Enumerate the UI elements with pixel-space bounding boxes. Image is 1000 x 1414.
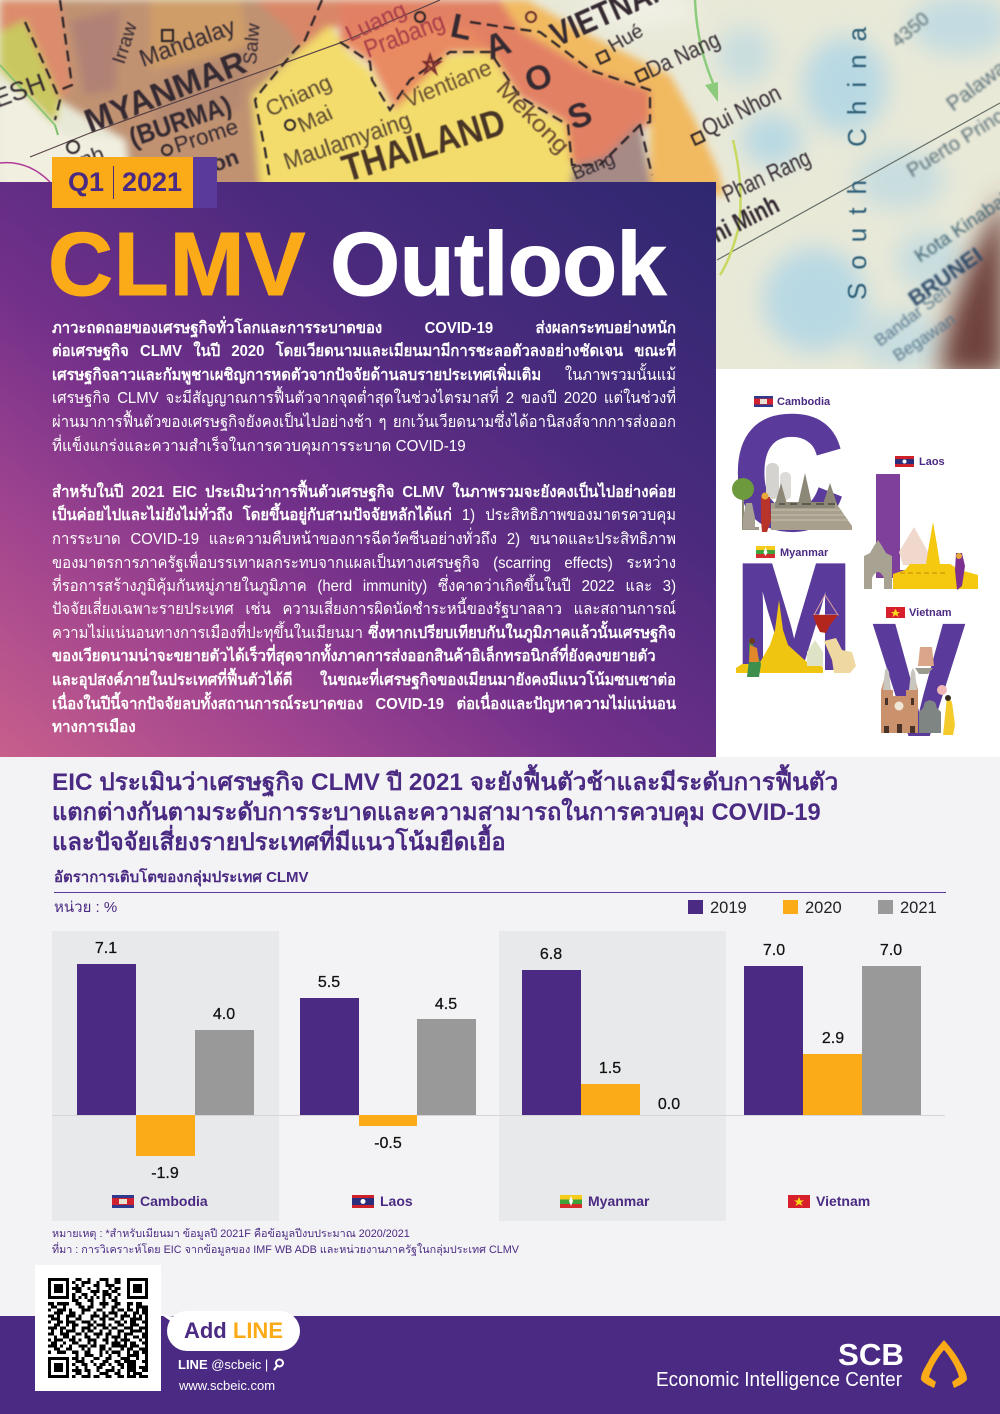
map photo background: Qui Nhon	[697, 80, 785, 142]
text block: intro paragraph 2: เป็นค่อยไปและไม่ยังไม่ทั่วถึง โดยขึ้นอยู่กับสามปัจจัยหลักได้แก่ 1) ประสิทธิภาพของมาตรควบคุม	[52, 507, 676, 524]
Myanmar group: Myanmar	[780, 547, 829, 559]
map photo background: Prabang	[360, 7, 449, 64]
unit label: หน่วย : %	[54, 899, 117, 916]
value labels: 5.5	[318, 974, 340, 991]
panel: CLMV illustration	[716, 369, 1000, 757]
map photo background: Mandalay	[136, 13, 239, 73]
footnotes: ที่มา : การวิเคราะห์โดย EIC จากข้อมูลของ IMF WB ADB และหน่วยงานภาครัฐในกลุ่มประเทศ CLMV	[52, 1244, 519, 1256]
bars: Myanmar	[522, 970, 640, 1115]
bars: Laos	[300, 998, 476, 1126]
value labels: 4.5	[435, 996, 457, 1013]
map photo background: Irraw	[109, 20, 142, 67]
QR code	[35, 1265, 161, 1391]
value labels: 7.0	[763, 942, 785, 959]
value labels: -0.5	[374, 1135, 402, 1152]
SCB wordmark: SCB	[838, 1337, 904, 1372]
map photo background: THAILAND	[337, 101, 510, 191]
value labels: 7.0	[880, 942, 902, 959]
text block: intro paragraph 2: ความไม่แน่นอนทางการเมืองที่ปะทุขึ้นในเมียนมา ซึ่งหากเปรียบเทียบกันในภูมิภาคแล้วนั้นเศรษฐกิจ	[52, 625, 676, 642]
map photo background: (BURMA)	[125, 90, 235, 153]
value labels: 1.5	[599, 1060, 621, 1077]
chart heading	[52, 764, 838, 856]
map photo background: Prome	[171, 114, 241, 158]
text block: intro paragraph 2: ของมาตรการภาครัฐเพื่อบรรเทาผลกระทบจากแผลเป็นทางเศรษฐกิจ (scarring effects) ระหว่าง	[52, 555, 676, 572]
chart subtitle: อัตราการเติบโตของกลุ่มประเทศ CLMV	[54, 869, 309, 886]
chart heading: EIC ประเมินว่าเศรษฐกิจ CLMV ปี 2021 จะยังฟื้นตัวช้าและมีระดับการฟื้นตัว	[52, 769, 838, 796]
footer band	[0, 1316, 1000, 1414]
icon: SCB logo	[921, 1340, 967, 1388]
text block: intro paragraph 2	[52, 480, 676, 736]
map photo background: L	[447, 7, 476, 48]
legend	[688, 899, 937, 917]
value labels	[95, 940, 902, 1182]
legend: 2019	[710, 899, 747, 917]
website: www.scbeic.com	[179, 1378, 275, 1393]
map photo background: Bang	[569, 149, 618, 185]
text block: intro paragraph 1: ต่อเศรษฐกิจ CLMV ในปี 2020 โดยเวียดนามและเมียนมามีการชะลอตัวลงอย่างชัดเจน ขณะที่	[52, 343, 676, 360]
map photo background: Phan Rang	[718, 144, 815, 208]
LINE handle: LINE @scbeic |	[178, 1357, 268, 1372]
text block: intro paragraph 1: ผ่านมาการฟื้นตัวของเศรษฐกิจยังคงเป็นไปอย่างช้า ๆ ยกเว้นเวียดนามซึ่งได้อานิสงส์จากการส่งออก	[52, 414, 676, 431]
text block: intro paragraph 2: ที่รอการสร้างภูมิคุ้มกันหมู่ภายในภูมิภาค (herd immunity) ซึ่งคาดว่าเกิดขึ้นในปี 2022 และ 3)	[52, 578, 676, 595]
SCB wordmark	[656, 1337, 904, 1391]
map photo background: A	[480, 23, 516, 68]
Myanmar group: M	[734, 532, 854, 702]
map photo background: Da Nang	[642, 26, 724, 83]
value labels: 0.0	[658, 1096, 680, 1113]
Cambodia group: C	[734, 383, 843, 562]
legend: 2021	[900, 899, 937, 917]
map photo background: Hué	[604, 20, 647, 57]
bar chart	[52, 899, 945, 1221]
text block: intro paragraph 2: สำหรับในปี 2021 EIC ประเมินว่าการฟื้นตัวเศรษฐกิจ CLMV ในภาพรวมจะยังคงเป็นไปอย่างค่อย	[52, 484, 676, 501]
value labels: 4.0	[213, 1006, 235, 1023]
map photo background: S	[563, 94, 597, 138]
country labels	[112, 1193, 870, 1209]
map photo background: Begawan	[890, 310, 959, 365]
map photo background: Maulamyaing	[280, 107, 415, 176]
country labels: Cambodia	[140, 1193, 208, 1209]
footnotes: หมายเหตุ : *สำหรับเมียนมา ข้อมูลปี 2021F คือข้อมูลปีงบประมาณ 2020/2021	[52, 1228, 410, 1240]
Laos group: Laos	[919, 456, 945, 468]
map photo background	[0, 0, 1000, 369]
text block: intro paragraph 1: เศรษฐกิจ CLMV จะมีสัญญาณการฟื้นตัวจากจุดต่ำสุดในช่วงไตรมาสที่ 2 ของปี 2020 แต่ในช่วงที่	[52, 390, 676, 407]
map photo background: South China	[842, 26, 872, 300]
quarter badge: Q1	[68, 167, 104, 197]
value labels: 2.9	[822, 1030, 844, 1047]
map photo background: Chiang	[262, 69, 335, 122]
Laos group	[864, 456, 978, 590]
text block: intro paragraph 2: และอุปสงค์ภายในประเทศที่ฟื้นตัวได้ดี ในขณะที่เศรษฐกิจของเมียนมายังคงมีแนวโน้มซบเซาต่อ	[52, 672, 676, 689]
text block: intro paragraph 1: ที่แข็งแกร่งและความสำเร็จในการควบคุมการระบาด COVID-19	[52, 438, 466, 455]
text block: intro paragraph 2: เนื่องในปีนี้จากปัจจัยลบทั้งสถานการณ์ระบาดของ COVID-19 ต่อเนื่องและปัญหาความไม่แน่นอน	[52, 696, 676, 713]
text block: intro paragraph 1: เศรษฐกิจลาวและกัมพูชาเผชิญการหดตัวจากปัจจัยด้านลบรายประเทศเพิ่มเติม ในภาพรวมนั้นแม้	[52, 367, 676, 384]
panel: intro gradient	[0, 182, 716, 757]
quarter badge	[52, 157, 217, 208]
chart heading: แตกต่างกันตามระดับการระบาดและความสามารถในการควบคุม COVID-19	[52, 799, 821, 826]
text block: intro paragraph 2: ทางการเมือง	[52, 719, 136, 736]
Add LINE bubble: Add LINE	[184, 1318, 283, 1343]
map photo background: O	[520, 56, 558, 101]
country labels: Laos	[380, 1193, 413, 1209]
SCB wordmark: Economic Intelligence Center	[656, 1369, 902, 1391]
map photo background: MYANMAR	[79, 43, 251, 140]
map photo background: BRUNEI	[904, 242, 987, 311]
footnotes	[52, 1228, 519, 1256]
value labels: -1.9	[151, 1165, 179, 1182]
title: CLMV Outlook	[48, 215, 666, 315]
legend: 2020	[805, 899, 842, 917]
text block: intro paragraph 2: ของเวียดนามน่าจะขยายตัวได้เร็วที่สุดจากทั้งภาคการส่งออกสินค้าอิเล็กทรอนิกส์ที่ยังคงขยายตัว	[52, 648, 656, 665]
map photo background: nh	[76, 141, 108, 173]
chart heading: และปัจจัยเสี่ยงรายประเทศที่มีแนวโน้มยืดเยื้อ	[52, 829, 506, 856]
chart subtitle	[54, 867, 946, 893]
Add LINE bubble	[162, 1311, 300, 1351]
text block: intro paragraph 2: ปัจจัยเสี่ยงเฉพาะรายประเทศ เช่น ความเสี่ยงการผิดนัดชำระหนี้ของรัฐบาลลาว และสถานการณ์	[52, 601, 676, 618]
quarter badge: 2021	[122, 167, 182, 197]
bars: Cambodia	[77, 964, 254, 1156]
map photo background: Mai	[294, 100, 336, 138]
text block: intro paragraph 1	[52, 316, 676, 456]
Cambodia group: Cambodia	[777, 396, 831, 408]
map photo background: Salw	[240, 22, 265, 65]
map photo background: on	[208, 144, 242, 177]
value labels: 7.1	[95, 940, 117, 957]
map photo background: Bandar Seri	[871, 281, 954, 350]
map photo background: hi Minh	[706, 189, 784, 248]
value labels: 6.8	[540, 946, 562, 963]
map photo background: Vientiane	[400, 54, 495, 113]
country labels: Myanmar	[588, 1193, 650, 1209]
text block: intro paragraph 1: ภาวะถดถอยของเศรษฐกิจทั่วโลกและการระบาดของ COVID-19 ส่งผลกระทบอย่างหนัก	[52, 320, 676, 337]
bars: Vietnam	[744, 966, 921, 1115]
map photo background: Mekong	[491, 75, 575, 159]
country labels: Vietnam	[816, 1193, 870, 1209]
text block: intro paragraph 2: การระบาด COVID-19 และความคืบหน้าของการฉีดวัคซีนอย่างทั่วถึง 2) ขนาดและประสิทธิภาพ	[52, 531, 676, 548]
Vietnam group: Vietnam	[909, 607, 952, 619]
map photo background: 4350	[888, 9, 934, 52]
